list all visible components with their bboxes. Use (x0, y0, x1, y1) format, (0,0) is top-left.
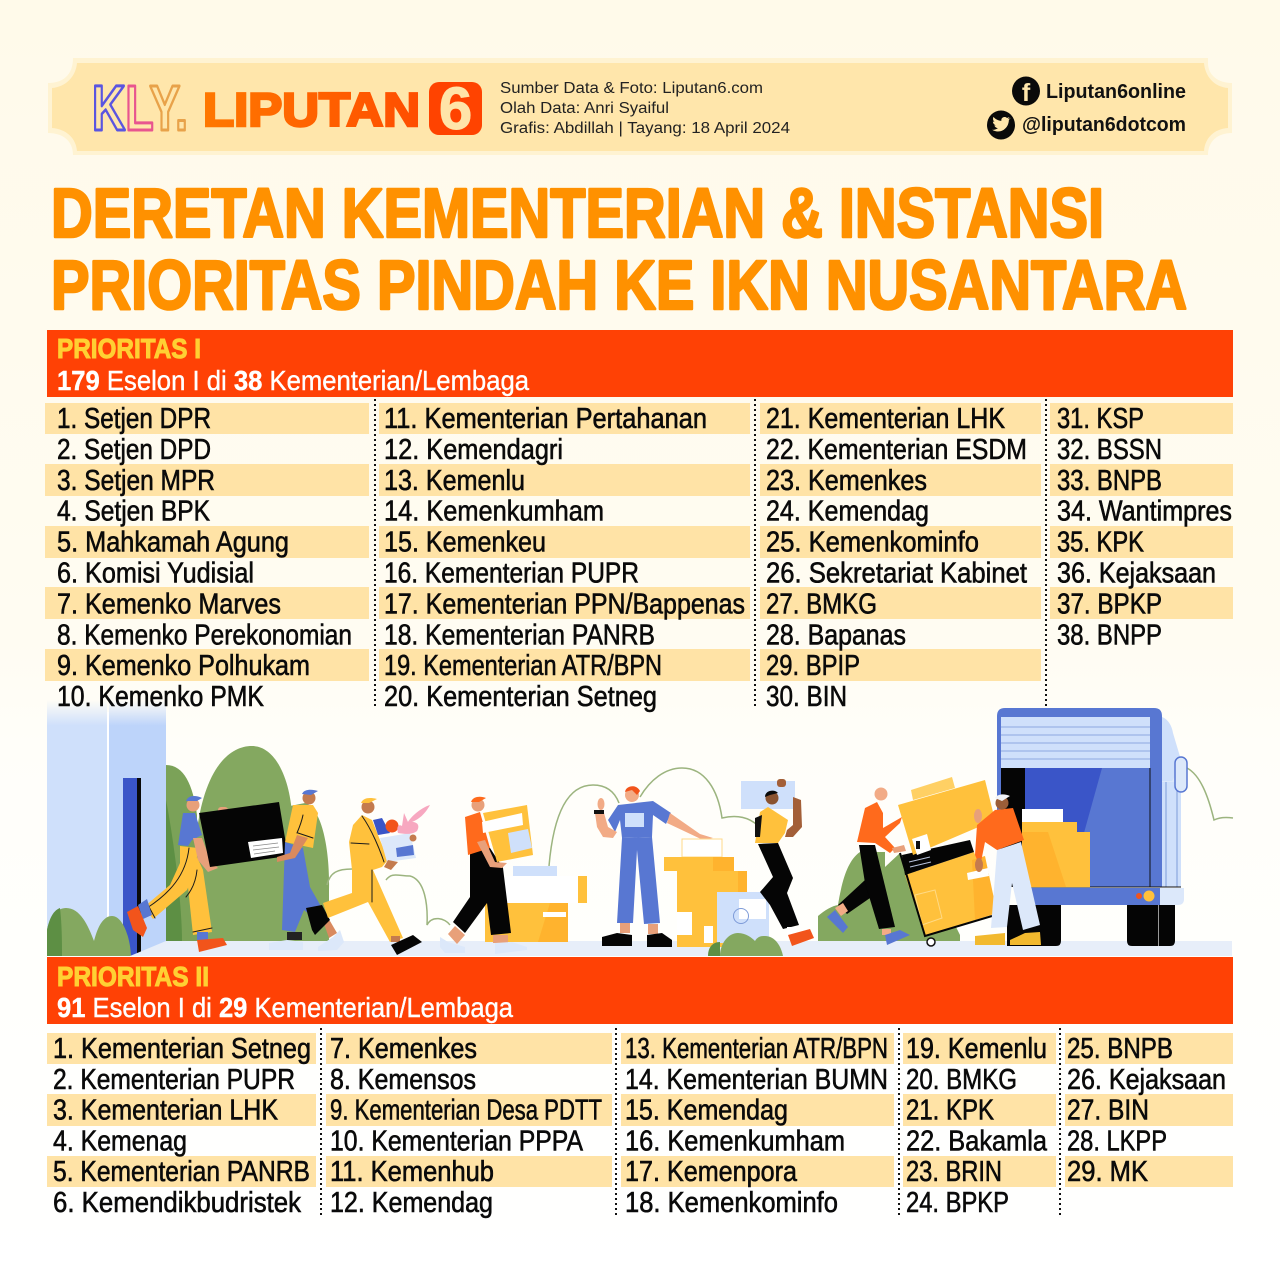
list: Prioritas I column 3: 21. Kementerian LHK (766, 403, 1006, 435)
twitter handle: @liputan6dotcom (1022, 114, 1186, 136)
list: Prioritas II column 2: 7. Kemenkes (330, 1033, 477, 1065)
bush behind mover (818, 852, 960, 941)
truck (997, 708, 1187, 946)
list: Prioritas II column 2: 9. Kementerian Desa PDTT (330, 1095, 602, 1127)
list: Prioritas I column 2: 18. Kementerian PANRB (384, 619, 655, 651)
credits text: Sumber Data & Foto: Liputan6.com (500, 80, 763, 97)
list: Prioritas II column 5: 27. BIN (1067, 1095, 1149, 1127)
list: Prioritas I column 2: 15. Kemenkeu (384, 527, 546, 559)
list: Prioritas I column 1: 3. Setjen MPR (57, 465, 215, 497)
hand truck with boxes (898, 777, 997, 946)
list: Prioritas I column 4: 33. BNPB (1057, 465, 1162, 497)
list: Prioritas II column 3: 14. Kementerian BUMN (625, 1064, 888, 1096)
icon: facebook (1012, 76, 1040, 107)
list: Prioritas II column 1: 6. Kemendikbudristek (53, 1187, 301, 1219)
credits text: Olah Data: Anri Syaiful (500, 100, 669, 117)
list: Prioritas I column 1: 5. Mahkamah Agung (57, 527, 289, 559)
panel: Prioritas II header (47, 957, 1233, 1024)
bush (708, 933, 783, 956)
list: Prioritas II column 1: 4. Kemenag (53, 1125, 187, 1157)
building (47, 700, 166, 956)
list: Prioritas II column 4: 22. Bakamla (906, 1125, 1048, 1157)
list: Prioritas I column 2: 17. Kementerian PPN/Bappenas (384, 588, 745, 620)
list: Prioritas II column 1: 3. Kementerian LHK (53, 1095, 279, 1127)
subheading: Prioritas II summary: 91 Eselon I di 29 Kementerian/Lembaga (57, 992, 513, 1023)
list: Prioritas II column 3: 13. Kementerian ATR/BPN (625, 1033, 888, 1065)
person: blue coverall supervisor (594, 786, 713, 947)
illustration: moving scene (47, 700, 1233, 956)
list: Prioritas I column 3: 29. BPIP (766, 650, 860, 682)
list: Prioritas II column 3: 17. Kemenpora (625, 1156, 798, 1188)
list: Prioritas I column 2: 13. Kemenlu (384, 465, 525, 497)
person: mover steadying boxes (974, 794, 1041, 945)
list: Prioritas I column 3: 24. Kemendag (766, 496, 929, 528)
box: light blue parcel (717, 892, 769, 943)
person: carrying box on shoulder (741, 779, 814, 946)
decorative plant curves (327, 768, 1233, 925)
list: Prioritas I column 4: 34. Wantimpres (1057, 496, 1232, 528)
list: Prioritas II column 5 (1065, 1033, 1233, 1188)
list: Prioritas II column 5: 26. Kejaksaan (1067, 1064, 1226, 1096)
list: Prioritas II column 2 (326, 1033, 612, 1219)
boxes: stack near supervisor (664, 839, 747, 947)
list: Prioritas I column 3: 30. BIN (766, 681, 847, 713)
person: yellow shirt helper (269, 790, 344, 951)
list: Prioritas I column 3 (760, 403, 1041, 713)
list: Prioritas I column 1: 6. Komisi Yudisial (57, 558, 254, 590)
list: Prioritas II column 3: 15. Kemendag (625, 1095, 788, 1127)
list: Prioritas II column 1 (47, 1033, 316, 1219)
list: Prioritas I column 1: 4. Setjen BPK (57, 496, 211, 528)
list: Prioritas I column 3: 28. Bapanas (766, 619, 906, 651)
list: Prioritas I column 2: 14. Kemenkumham (384, 496, 604, 528)
list: Prioritas II column 4: 19. Kemenlu (906, 1033, 1047, 1065)
list: Prioritas II column 4: 23. BRIN (906, 1156, 1002, 1188)
list: Prioritas II column 5: 25. BNPB (1067, 1033, 1173, 1065)
floor (130, 941, 1232, 956)
list: Prioritas I column 1: 7. Kemenko Marves (57, 588, 281, 620)
list: Prioritas I column 1 (45, 403, 369, 713)
list: Prioritas I column 2: 20. Kementerian Setneg (384, 681, 657, 713)
list: Prioritas I column 4 (1050, 403, 1233, 651)
subheading: Prioritas I summary: 179 Eselon I di 38 Kementerian/Lembaga (57, 365, 529, 396)
icon: facebook: f (1022, 79, 1031, 107)
list: Prioritas I column 3: 25. Kemenkominfo (766, 527, 979, 559)
list: Prioritas I column 4: 32. BSSN (1057, 434, 1162, 466)
list: Prioritas I column 3: 27. BMKG (766, 588, 877, 620)
list: Prioritas II column 4 (903, 1033, 1056, 1219)
person: mover pushing hand truck (827, 788, 910, 945)
boxes: stack near person 4 (485, 866, 587, 942)
person: carrying black box (127, 796, 288, 952)
list: Prioritas II column 2: 12. Kemendag (330, 1187, 493, 1219)
list: Prioritas II column 2: 8. Kemensos (330, 1064, 476, 1096)
list: Prioritas I column 1: 8. Kemenko Perekonomian (57, 619, 352, 651)
list: Prioritas I column 2 (379, 403, 750, 713)
panel: Prioritas I header (47, 330, 1233, 397)
header banner (48, 58, 1232, 155)
list: Prioritas I column 3: 22. Kementerian ESDM (766, 434, 1027, 466)
list: Prioritas II column 1: 1. Kementerian Setneg (53, 1033, 311, 1065)
list: Prioritas I column 2: 11. Kementerian Pertahanan (384, 403, 707, 435)
list: Prioritas II column 5: 29. MK (1067, 1156, 1149, 1188)
list: Prioritas II column 1: 5. Kementerian PANRB (53, 1156, 310, 1188)
list: Prioritas II column 4: 20. BMKG (906, 1064, 1017, 1096)
credits text (500, 80, 790, 137)
list: Prioritas II column 3: 16. Kemenkumham (625, 1125, 845, 1157)
logo: KLY: KLY. (92, 72, 188, 144)
facebook handle: Liputan6online (1046, 81, 1186, 103)
list: Prioritas I column 1: 9. Kemenko Polhukam (57, 650, 310, 682)
list: Prioritas II column 2: 11. Kemenhub (330, 1156, 494, 1188)
list: Prioritas I column 2: 19. Kementerian ATR/BPN (384, 650, 662, 682)
logo: 6 badge: 6 (439, 75, 472, 142)
list: Prioritas I column 2: 16. Kementerian PUPR (384, 558, 639, 590)
trees (47, 746, 329, 956)
list: Prioritas I column 4: 38. BNPP (1057, 619, 1162, 651)
heading: Prioritas I: PRIORITAS I (57, 333, 201, 364)
icon: twitter (987, 110, 1015, 140)
list: Prioritas I column 2: 12. Kemendagri (384, 434, 563, 466)
list: Prioritas II column 4: 24. BPKP (906, 1187, 1009, 1219)
list: Prioritas I column 3: 23. Kemenkes (766, 465, 927, 497)
heading: Prioritas II: PRIORITAS II (57, 961, 209, 992)
credits text: Grafis: Abdillah | Tayang: 18 April 2024 (500, 120, 790, 137)
list: Prioritas II column 1: 2. Kementerian PUPR (53, 1064, 295, 1096)
list: Prioritas I column 1: 2. Setjen DPD (57, 434, 211, 466)
list: Prioritas I column 4: 31. KSP (1057, 403, 1144, 435)
list: Prioritas II column 3 (621, 1033, 894, 1219)
logo: Liputan: LIPUTAN (203, 83, 420, 136)
list: Prioritas II column 3: 18. Kemenkominfo (625, 1187, 838, 1219)
person: yellow jumpsuit with plant box (306, 798, 430, 955)
title (51, 174, 1187, 324)
person: orange shirt with yellow box (440, 797, 533, 954)
list: Prioritas II column 5: 28. LKPP (1067, 1125, 1167, 1157)
list: Prioritas II column 4: 21. KPK (906, 1095, 995, 1127)
logo: 6 badge (429, 75, 482, 142)
list: Prioritas I column 4: 35. KPK (1057, 527, 1145, 559)
list: Prioritas I column 1: 1. Setjen DPR (57, 403, 211, 435)
list: Prioritas I column 4: 36. Kejaksaan (1057, 558, 1216, 590)
list: Prioritas I column 3: 26. Sekretariat Kabinet (766, 558, 1027, 590)
list: Prioritas II column 2: 10. Kementerian PPPA (330, 1125, 584, 1157)
list: Prioritas I column 1: 10. Kemenko PMK (57, 681, 265, 713)
list: Prioritas I column 4: 37. BPKP (1057, 588, 1162, 620)
